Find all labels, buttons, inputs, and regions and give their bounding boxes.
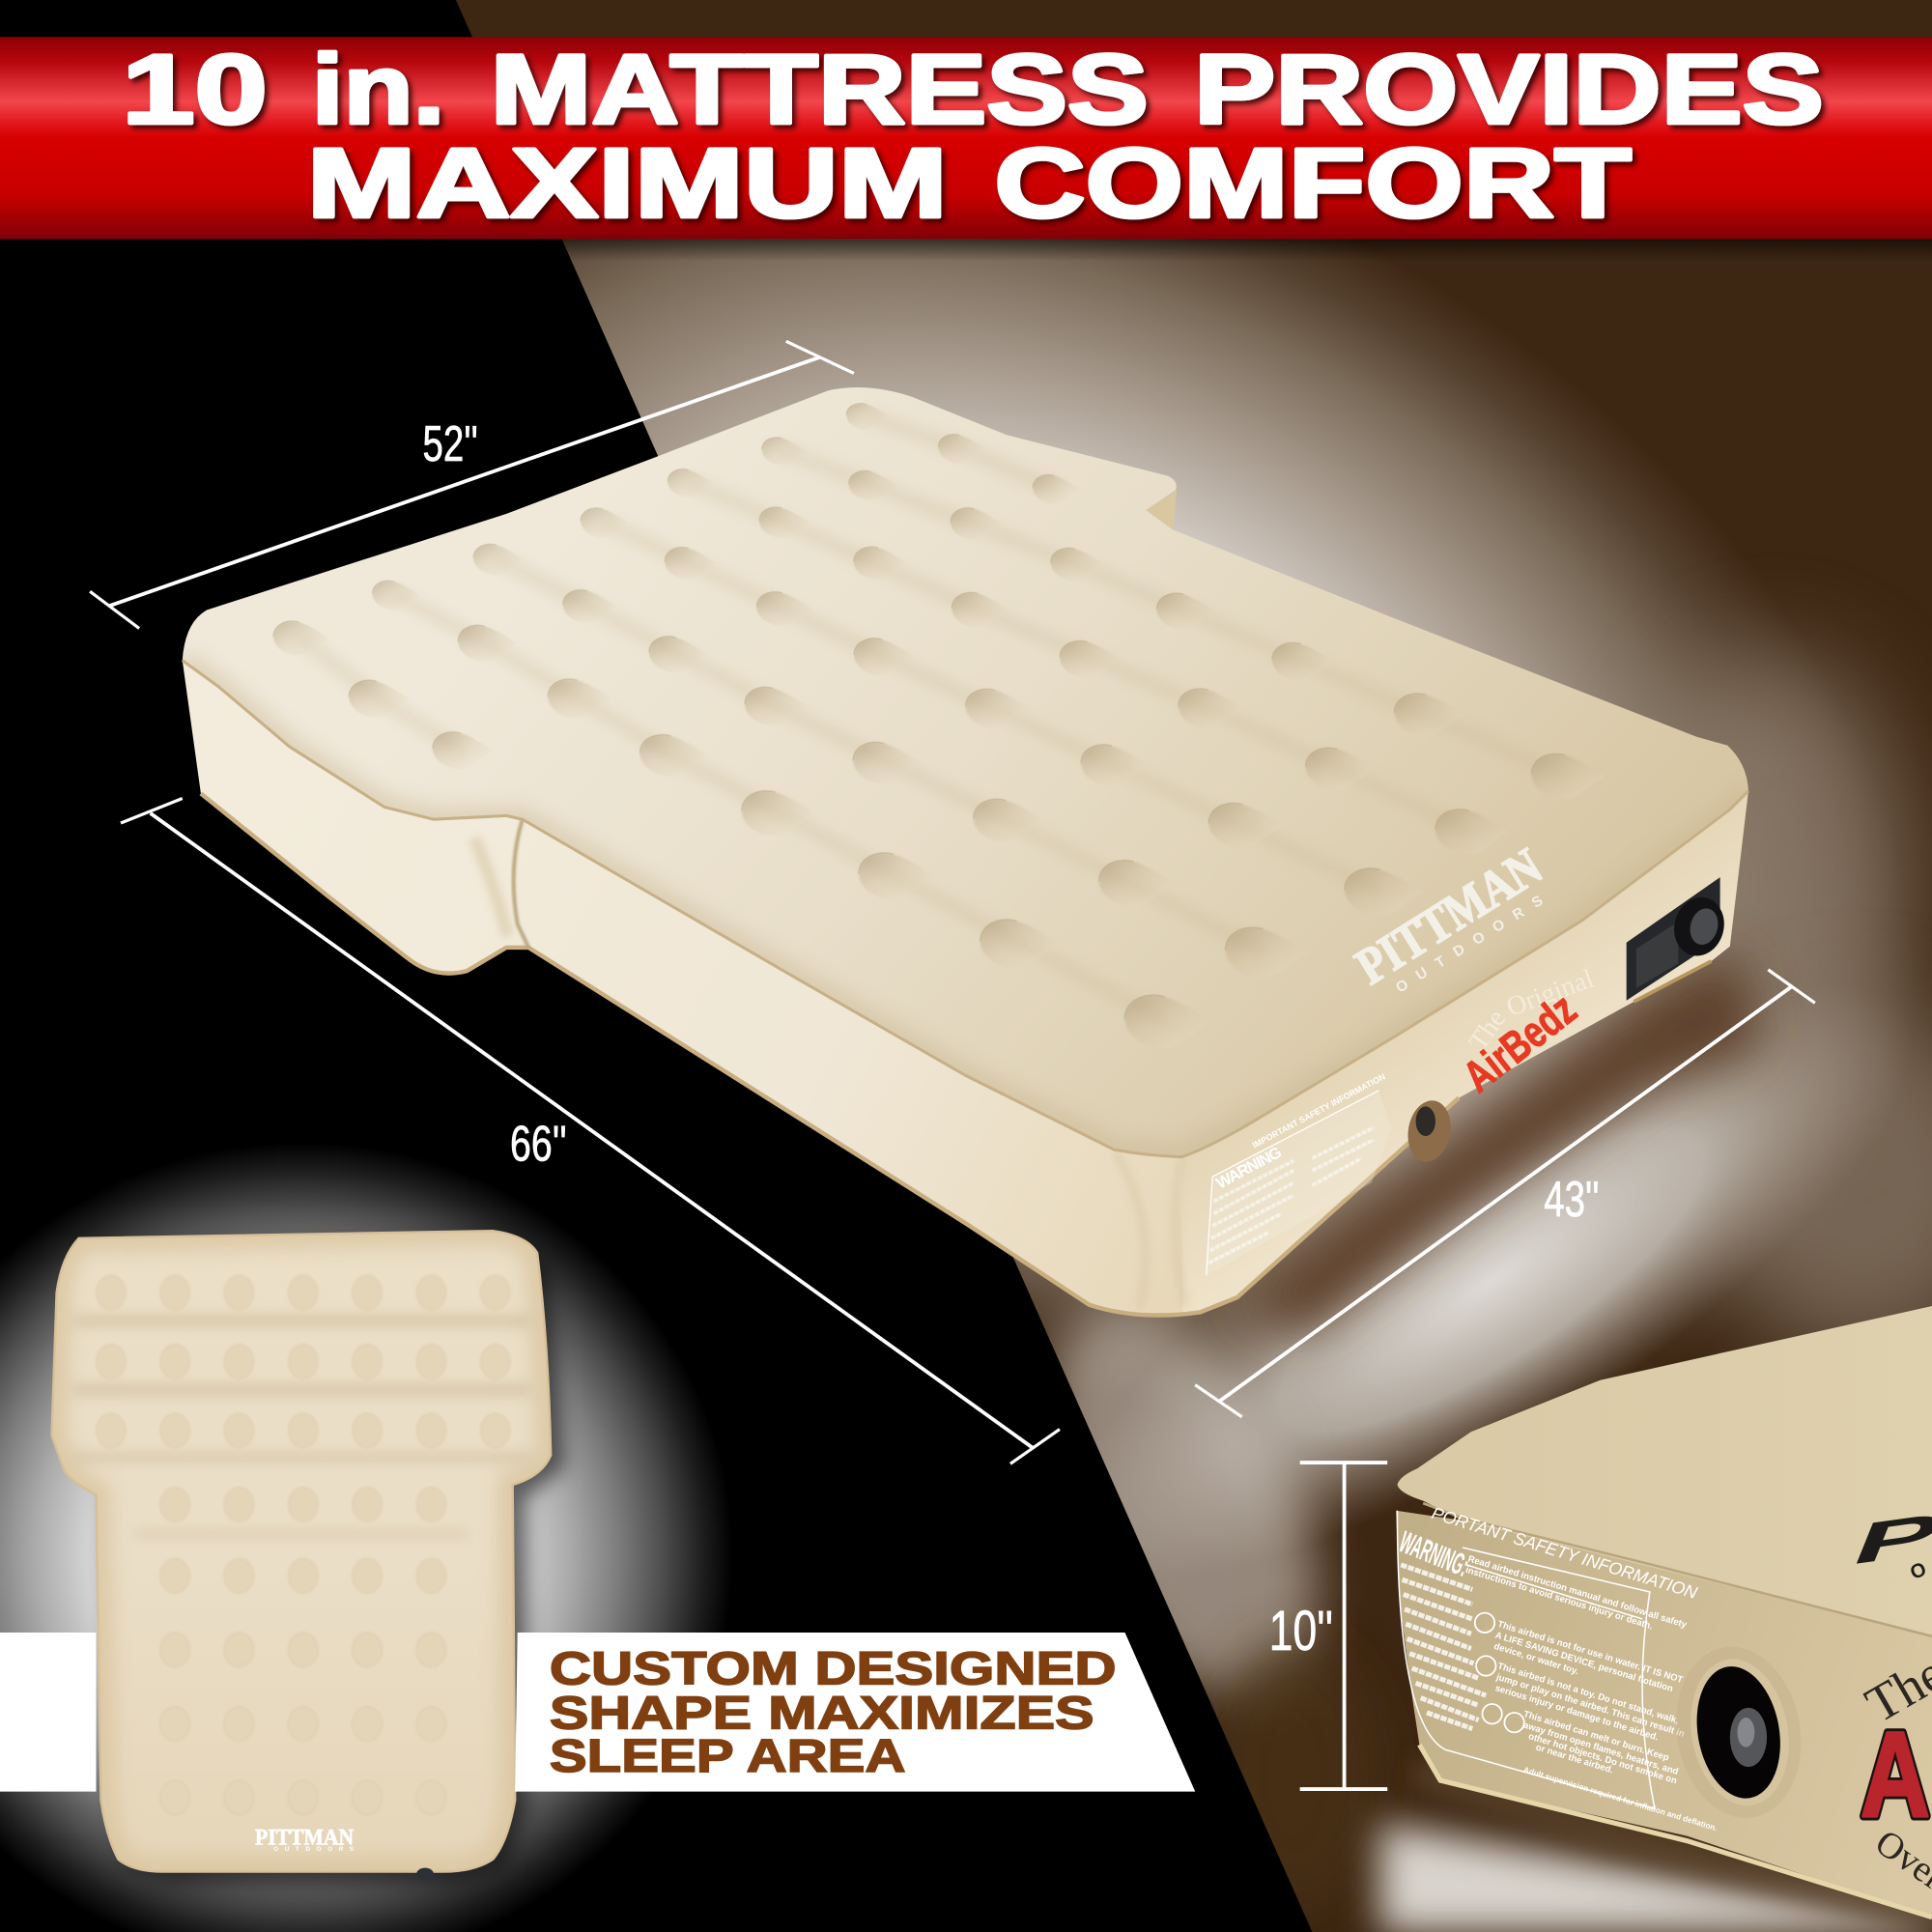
callout text: SHAPE MAXIMIZES [550, 1688, 1094, 1740]
top banner [0, 35, 1932, 261]
small dimples [96, 1275, 510, 1815]
crop warning label: This airbed is not a toy. Do not stand, walk, [1496, 1661, 1680, 1726]
logo: Pittman Outdoors: OUTDOORS [1393, 893, 1546, 996]
label 43: 43'' [1544, 1172, 1600, 1228]
shading clipped to body [52, 1231, 551, 1872]
warning label: IMPORTANT SAFETY INFORMATION [1251, 1071, 1387, 1151]
title: COMFORT [994, 128, 1632, 238]
title: 10 [122, 35, 268, 145]
drop shadow [89, 1239, 564, 1883]
crop warning label: other hot objects. Do not smoke on [1527, 1731, 1678, 1786]
title [122, 35, 1824, 238]
detail crop: mattress corner [1395, 1306, 1932, 1918]
callout text: CUSTOM DESIGNED [550, 1643, 1117, 1695]
title: PROVIDES [1194, 35, 1824, 145]
corner wrinkles [1115, 1152, 1185, 1309]
glow behind top-view mattress [0, 1142, 788, 1932]
callout text [550, 1643, 1117, 1782]
front side panel [1181, 791, 1748, 1314]
crop warning label: or near the airbed. [1534, 1743, 1614, 1776]
brown background wedge [456, 0, 1932, 1932]
title: MATTRESS [491, 35, 1149, 145]
crop seam and piping [1423, 1503, 1932, 1636]
title: in. [312, 35, 444, 145]
seam [183, 661, 1748, 1157]
crop warning label: instructions to avoid serious injury or death. [1464, 1565, 1654, 1633]
dimension: 52 inches [90, 341, 854, 629]
surface edge and valley shading [183, 416, 1748, 1157]
dimples [273, 404, 1605, 1048]
top-view mattress [52, 1231, 564, 1883]
pump panel [1627, 877, 1730, 1001]
crop warning label [1395, 1503, 1719, 1833]
warning label: WARNING [1213, 1143, 1285, 1192]
callout text: SLEEP AREA [550, 1730, 905, 1782]
crop logo lettering: O [1907, 1558, 1929, 1584]
crop valve hole [1676, 1666, 1801, 1807]
valve [1404, 1097, 1455, 1165]
bottom piping [201, 793, 1459, 1316]
crop warning label: PORTANT SAFETY INFORMATION [1430, 1503, 1699, 1603]
logo: Pittman Outdoors: PITTMAN [1346, 837, 1551, 996]
crop warning label: This airbed can melt or burn. Keep [1522, 1709, 1670, 1764]
crop logo lettering [1857, 1517, 1932, 1889]
warning label [1207, 1071, 1391, 1275]
logo: The Original AirBedz: Original [1503, 964, 1598, 1023]
dimension: 66 inches [121, 799, 1060, 1463]
small valve [416, 1868, 434, 1880]
crop side panel [1396, 1511, 1932, 1918]
dimension: 43 inches [1195, 970, 1815, 1417]
crop warning label: jump or play on the airbed. This can result in [1494, 1672, 1686, 1740]
logo: The Original AirBedz: The [1463, 1005, 1512, 1056]
title: MAXIMUM [307, 128, 948, 238]
label 66: 66'' [510, 1117, 567, 1173]
crop top surface [1397, 1306, 1932, 1636]
notch side at back [1146, 491, 1177, 529]
white callout band [0, 1633, 1195, 1792]
main mattress [183, 387, 1748, 1316]
crop warning label: This airbed is not for use in water. IT IS NOT [1496, 1619, 1684, 1686]
label 10: 10'' [1269, 1600, 1333, 1662]
crop warning label: Adult supervision required for inflation and deflation. [1522, 1765, 1719, 1833]
crop warning label: away from open flames, heaters, and [1522, 1720, 1680, 1777]
small logo: PITTMAN [255, 1825, 354, 1849]
crop warning label: A LIFE SAVING DEVICE, personal flotation [1493, 1631, 1674, 1694]
dimension: 10 inches [1269, 1463, 1387, 1789]
label 52: 52'' [423, 416, 478, 472]
crop warning label: device, or water toy. [1492, 1641, 1579, 1677]
crop warning label: WARNING: [1395, 1524, 1474, 1583]
left side panel [183, 661, 1336, 1316]
mattress body [52, 1231, 551, 1872]
logo: The Original AirBedz: AirBedz [1454, 983, 1585, 1102]
side fold [514, 819, 528, 948]
small logo: OUTDOORS [273, 1846, 354, 1853]
crop warning label: serious injury or damage to the airbed. [1493, 1683, 1660, 1743]
crop warning label: Read airbed instruction manual and follow all safety [1466, 1553, 1689, 1631]
top surface [183, 387, 1748, 1157]
